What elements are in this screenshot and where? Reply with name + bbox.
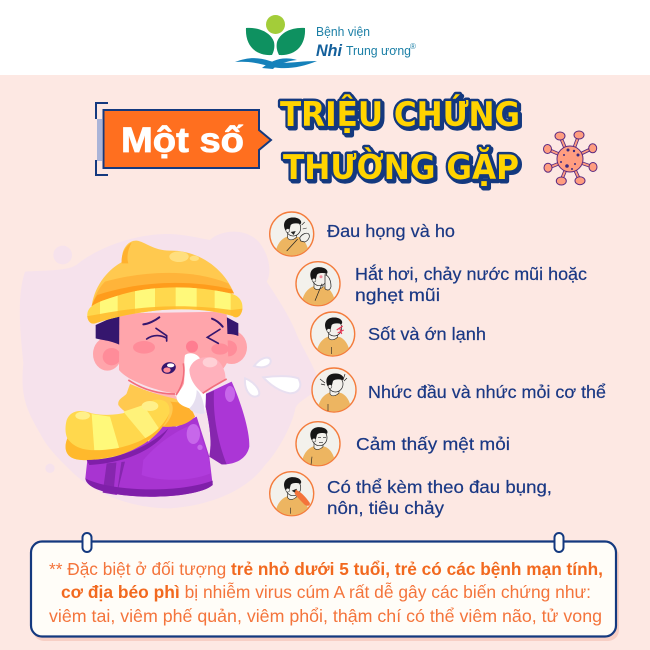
callout: note on high-risk groups: ** Đặc biệt ở đối tượng trẻ nhỏ dưới 5 tuổi, trẻ có các bệnh mạn tính, [49, 559, 603, 579]
logo text: Bệnh viện [316, 24, 370, 39]
sweater [85, 415, 213, 497]
symptom: headache and body aches: Nhức đầu và nhức mỏi cơ thể [368, 382, 606, 402]
icon: tired person [296, 422, 340, 466]
face [133, 317, 229, 376]
icon: vomiting person [270, 472, 314, 516]
symptom: fever and chills: Sốt và ớn lạnh [368, 324, 486, 344]
icon: coughing person [270, 212, 314, 256]
symptom: headache and body aches [312, 368, 606, 412]
arm [203, 382, 249, 464]
symptom: sore throat and cough [270, 212, 455, 256]
logo text: Trung ương [346, 43, 411, 58]
hat rim [87, 287, 242, 324]
logo text [316, 24, 416, 60]
title [280, 94, 520, 188]
banner: Một số: Một số [121, 121, 244, 160]
title: TRIỆU CHỨNG [280, 94, 520, 135]
symptom: fatigue [296, 422, 510, 466]
callout: note on high-risk groups: viêm tai, viêm phế quản, viêm phổi, thậm chí có thể viêm não, tử vong [49, 606, 602, 626]
symptom: fever and chills [311, 312, 486, 356]
sneeze droplets [245, 358, 300, 397]
symptom: sore throat and cough: Đau họng và ho [327, 221, 455, 241]
symptom: stomach ache, vomiting, diarrhea: nôn, tiêu chảy [327, 498, 444, 518]
tissue and hand [176, 353, 227, 414]
icon: virus [544, 131, 597, 185]
icon: person holding nose [296, 262, 340, 306]
logo text: ® [410, 42, 416, 51]
callout: note on high-risk groups: cơ địa béo phì bị nhiễm virus cúm A rất dễ gây các biến chứng như: [61, 581, 591, 602]
head [93, 312, 247, 402]
symptom: stomach ache, vomiting, diarrhea [270, 472, 552, 518]
title: THƯỜNG GẶP [283, 147, 519, 188]
symptom: sneezing and runny nose [296, 262, 587, 306]
symptom: fatigue: Cảm thấy mệt mỏi [356, 434, 510, 454]
banner: Một số [96, 103, 271, 175]
background blob [20, 232, 320, 508]
callout: note on high-risk groups [31, 533, 619, 641]
symptom: sneezing and runny nose: nghẹt mũi [355, 285, 440, 305]
icon: person with headache [312, 368, 356, 412]
symptom: stomach ache, vomiting, diarrhea: Có thể kèm theo đau bụng, [327, 477, 552, 497]
symptom: sneezing and runny nose: Hắt hơi, chảy nước mũi hoặc [355, 263, 587, 284]
logo [235, 15, 416, 69]
logo text: Nhi [316, 41, 343, 60]
scarf [65, 384, 195, 465]
hat [92, 241, 234, 306]
icon: person with fever [311, 312, 355, 356]
icon: logo mark [235, 15, 317, 69]
illustration: sneezing boy [20, 232, 320, 508]
